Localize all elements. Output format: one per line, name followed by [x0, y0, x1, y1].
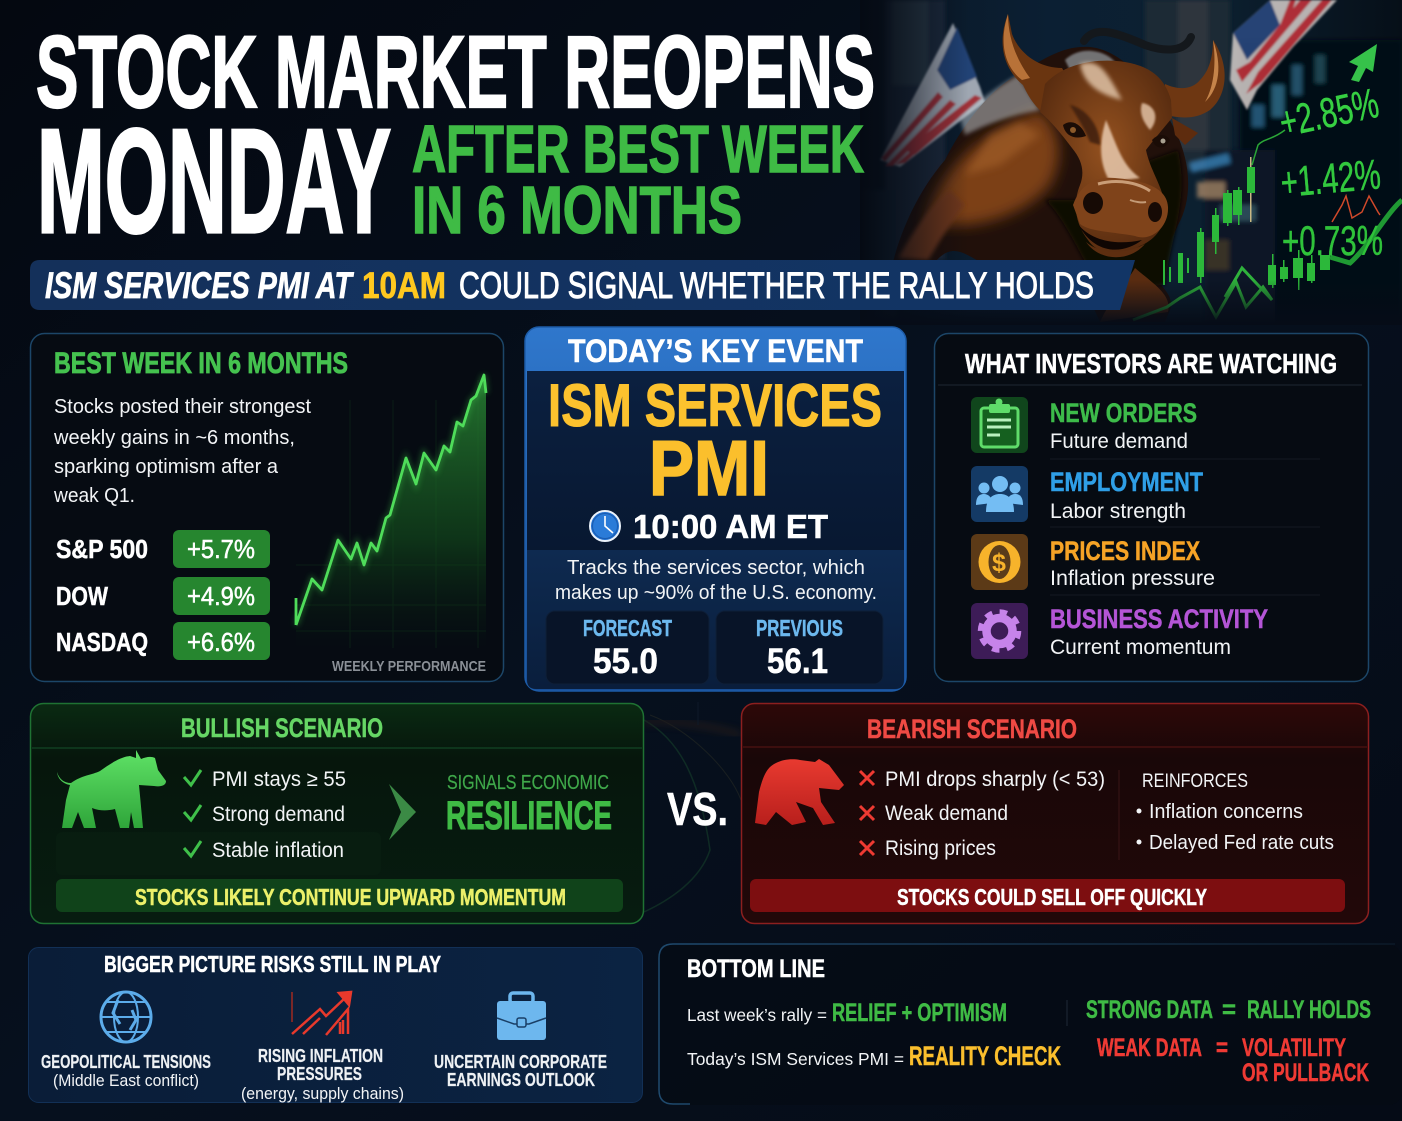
hero image: bull on Wall Street: [860, 0, 1402, 330]
business activity: [1050, 604, 1268, 659]
callout bar: [56, 879, 623, 912]
business activity: Current momentum: [1050, 636, 1231, 659]
index rows: [56, 530, 270, 660]
icon: clipboard: [971, 397, 1028, 453]
stat: previous: [716, 611, 883, 684]
subtitle green: AFTER BEST WEEK: [412, 112, 864, 187]
bull body: [893, 47, 1188, 322]
stat: previous: PREVIOUS: [756, 615, 843, 641]
panel: what investors are watching: [934, 334, 1368, 682]
panel: bottom line: [659, 944, 1402, 1105]
reality check: REALITY CHECK: [909, 1041, 1061, 1071]
risk: inflation: PRESSURES: [277, 1064, 362, 1084]
prices index: [1050, 536, 1215, 590]
heading: best week: BEST WEEK IN 6 MONTHS: [54, 347, 348, 380]
x list: PMI drops sharply (< 53): [885, 768, 1105, 791]
index rows: +5.7%: [187, 534, 255, 564]
icon: globe: [101, 992, 151, 1042]
banner: COULD SIGNAL WHETHER THE RALLY HOLDS: [459, 265, 1094, 306]
icon: rising inflation: [292, 992, 351, 1035]
subtitle green: [412, 112, 864, 248]
candlestick chart: [1163, 157, 1330, 290]
prices index: PRICES INDEX: [1050, 536, 1200, 566]
index rows: DOW: [56, 581, 108, 611]
text: description: Stocks posted their strongest: [54, 395, 311, 418]
reality check: [687, 1041, 1061, 1071]
outcome: resilience: SIGNALS ECONOMIC: [447, 772, 609, 794]
icon: briefcase: [497, 993, 546, 1040]
new orders: [1050, 398, 1197, 453]
left flag: [880, 23, 985, 167]
banner: 10AM: [362, 265, 446, 306]
stat: forecast: [546, 611, 709, 684]
x list: Weak demand: [885, 802, 1008, 825]
heading: risks: BIGGER PICTURE RISKS STILL IN PLAY: [104, 951, 441, 977]
risk: inflation: RISING INFLATION: [258, 1046, 383, 1066]
subtitle green: IN 6 MONTHS: [412, 173, 742, 248]
icon: dollar coin: [971, 534, 1028, 590]
outcome: resilience: [446, 772, 612, 838]
text: description: Tracks the services sector, which: [567, 556, 865, 579]
icon: people: [971, 466, 1028, 522]
x list: [860, 768, 1105, 860]
banner: [30, 260, 1135, 310]
strong data: =: [1222, 996, 1236, 1024]
reinforces list: Inflation concerns: [1149, 801, 1303, 823]
vs label: VS.: [667, 783, 728, 835]
green trend lines: [1133, 130, 1402, 320]
bull muzzle: [1073, 178, 1168, 237]
text: description: [53, 395, 311, 507]
risk: geopolitical: [41, 1052, 211, 1090]
banner: ISM SERVICES PMI AT: [45, 265, 355, 306]
callout bar: STOCKS COULD SELL OFF QUICKLY: [897, 884, 1207, 910]
text: description: weak Q1.: [53, 484, 135, 507]
outcome: resilience: RESILIENCE: [446, 794, 612, 838]
strong data: [1086, 996, 1371, 1024]
panel: today's key event: [525, 327, 906, 691]
strong data: STRONG DATA: [1086, 996, 1213, 1024]
reinforces list: Delayed Fed rate cuts: [1149, 832, 1334, 854]
title line 1: STOCK MARKET REOPENS: [36, 15, 875, 129]
last week's rally: Last week’s rally =: [687, 1005, 827, 1025]
chart: weekly performance: [296, 375, 486, 675]
panel: best week in 6 months: [30, 334, 504, 682]
x list: Rising prices: [885, 837, 996, 860]
event title: PMI: [649, 424, 769, 512]
callout bar: STOCKS LIKELY CONTINUE UPWARD MOMENTUM: [135, 884, 566, 910]
prices index: Inflation pressure: [1050, 567, 1215, 590]
employment: EMPLOYMENT: [1050, 467, 1203, 497]
checklist: [184, 768, 346, 862]
reinforces list: [1136, 770, 1334, 854]
risk: geopolitical: (Middle East conflict): [53, 1072, 199, 1090]
heading: bottom line: BOTTOM LINE: [687, 955, 825, 983]
employment: Labor strength: [1050, 500, 1186, 523]
panel: bearish scenario: [742, 704, 1368, 924]
bull eyes: [1063, 118, 1198, 148]
icon: dollar coin: $: [992, 549, 1006, 577]
icon: green bull: [57, 750, 166, 828]
risk: earnings: [434, 1052, 607, 1090]
heading: today's key event: TODAY’S KEY EVENT: [568, 333, 863, 369]
icon: gear: [971, 603, 1028, 659]
event title: [548, 372, 882, 512]
heading: bearish: BEARISH SCENARIO: [867, 714, 1077, 744]
index rows: NASDAQ: [56, 627, 148, 657]
percent labels: [1281, 88, 1382, 256]
icon: red bear: [755, 759, 844, 825]
chart: weekly performance: WEEKLY PERFORMANCE: [332, 658, 486, 675]
bull head: [1040, 61, 1172, 254]
text: description: [555, 556, 877, 604]
event time: 10:00 AM ET: [633, 508, 828, 545]
risk: earnings: EARNINGS OUTLOOK: [447, 1070, 595, 1090]
weak data: VOLATILITY: [1242, 1034, 1346, 1062]
index rows: +6.6%: [187, 627, 255, 657]
event title: ISM SERVICES: [548, 372, 882, 439]
last week's rally: RELIEF + OPTIMISM: [832, 999, 1007, 1027]
text: description: makes up ~90% of the U.S. economy.: [555, 581, 877, 604]
weak data: [1097, 1034, 1369, 1087]
text: description: weekly gains in ~6 months,: [53, 426, 295, 449]
risk: geopolitical: GEOPOLITICAL TENSIONS: [41, 1052, 211, 1072]
last week's rally: [687, 999, 1007, 1027]
panel: bullish scenario: [30, 704, 644, 924]
bull tail: [1084, 32, 1191, 50]
heading: bullish: BULLISH SCENARIO: [181, 713, 383, 743]
reinforces list: REINFORCES: [1142, 770, 1248, 792]
weak data: =: [1216, 1034, 1228, 1062]
panel: bigger picture risks: [28, 948, 642, 1103]
title line 2: MONDAY: [37, 99, 391, 264]
checklist: Stable inflation: [212, 839, 344, 862]
risk: inflation: (energy, supply chains): [241, 1085, 404, 1103]
bull horns: [1002, 14, 1064, 110]
risk: inflation: [241, 1046, 404, 1103]
employment: [1050, 467, 1203, 523]
checklist: Strong demand: [212, 803, 345, 826]
green arrow: [1349, 44, 1377, 82]
reality check: Today’s ISM Services PMI =: [687, 1049, 904, 1069]
stat: forecast: 55.0: [593, 642, 658, 681]
new orders: Future demand: [1050, 430, 1188, 453]
stat: forecast: FORECAST: [583, 615, 672, 641]
text: description: sparking optimism after a: [54, 455, 279, 478]
arrow chevron: [389, 784, 416, 840]
index rows: S&P 500: [56, 534, 148, 564]
checklist: PMI stays ≥ 55: [212, 768, 346, 791]
business activity: BUSINESS ACTIVITY: [1050, 604, 1268, 634]
index rows: +4.9%: [187, 581, 255, 611]
right flag: [1230, 0, 1337, 110]
icon: clock: [590, 511, 620, 541]
vs connector arcs: [644, 702, 741, 912]
risk: earnings: UNCERTAIN CORPORATE: [434, 1052, 607, 1072]
stat: previous: 56.1: [767, 642, 828, 681]
weak data: WEAK DATA: [1097, 1034, 1202, 1062]
new orders: NEW ORDERS: [1050, 398, 1197, 428]
callout bar: [750, 879, 1345, 912]
